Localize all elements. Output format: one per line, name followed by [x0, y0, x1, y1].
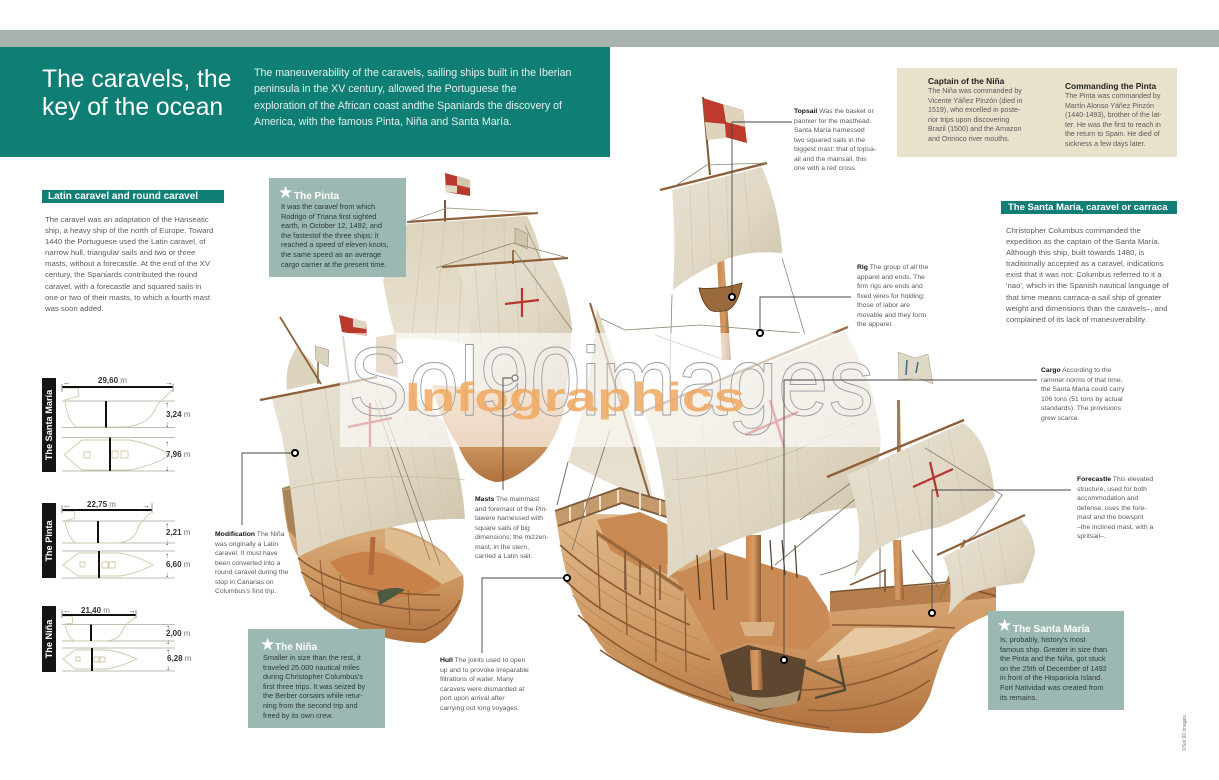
callout box: The Pinta: [269, 178, 406, 277]
sail: Pinta fore: [458, 261, 572, 400]
text: [281, 202, 389, 269]
ship: Santa María: [555, 97, 1035, 733]
callout: Topsail: Santa María harnessed: [794, 127, 865, 134]
callout: Forecastle: –the inclined mast, with a: [1077, 524, 1153, 531]
dimension arrows: ↑: [165, 439, 169, 448]
text: during Christopher Columbus's: [263, 672, 363, 681]
text: Captain of the Niña: rior trips upon discovering: [928, 116, 1009, 124]
sterncastle: Santa María: [597, 512, 680, 568]
tab: The Pinta: The Pinta: [44, 520, 54, 561]
callout: Modification: been converted into a: [215, 560, 280, 567]
text: Commanding the Pinta: sickness a few days later.: [1065, 140, 1145, 148]
dimension arrows: ↓: [165, 420, 169, 429]
credit: ©Sol 90 Images: [1182, 715, 1188, 751]
callout: Topsail: biggest mast: that of topsa-: [794, 146, 876, 153]
forecastle: Santa María: [830, 580, 996, 612]
hull: Niña: [282, 488, 464, 643]
text: [1000, 635, 1107, 702]
sail: Santa María bowsprit: [943, 518, 1035, 615]
callout: Rig: the apparel.: [857, 321, 893, 328]
text: Latin caravel: ship, a heavy ship of the north of Europe. Toward: [45, 226, 213, 235]
header panel: [0, 47, 610, 157]
title: key of the ocean: [42, 94, 223, 121]
deck: Santa María: [597, 537, 830, 653]
dimension arrows: ↓: [165, 570, 169, 579]
text: Santa María: expedition as the captain of the Santa María.: [1006, 237, 1160, 246]
text: Latin caravel: masts, without a forecastle. At the end of the XV: [45, 259, 210, 268]
callout: Rig: apparel and ends. The: [857, 274, 925, 281]
dimension: 6,28 m: 6,28 m: [167, 654, 191, 663]
icon: star: ★: [997, 616, 1012, 635]
title: [42, 66, 231, 121]
dimension arrows: ↑: [165, 551, 169, 560]
text: its remains.: [1000, 693, 1037, 702]
intro text: peninsula in the XV century, allowed the Portuguese the: [254, 83, 516, 95]
text: reached a speed of eleven knots,: [281, 240, 389, 249]
callout: Cargo: Cargo According to the: [1041, 367, 1111, 374]
callout: Hull: caravels were dismantled at: [440, 686, 524, 693]
callout: Cargo: standards). The provisions: [1041, 405, 1121, 412]
text: the Berber corsairs while retur-: [263, 691, 363, 700]
callout: Forecastle: accommodation and: [1077, 495, 1138, 502]
heading: Latin caravel and round caravel: [42, 190, 224, 203]
callout: Modification: Columbus's first trip.: [215, 588, 276, 595]
dimension arrows: →: [128, 606, 136, 615]
text: freed by its own crew.: [263, 711, 333, 720]
callout box: The Niña: [248, 629, 385, 728]
callout: Rig: movable and they form: [857, 312, 926, 319]
tab: The Niña: [42, 606, 56, 672]
dimension arrows: ←: [63, 606, 71, 615]
text: first three trips. It was seized by: [263, 682, 365, 691]
callout: Forecastle: mast and the bowsprit: [1077, 514, 1144, 521]
callout: Topsail: ail and the mainsail, this: [794, 156, 867, 163]
text: Latin caravel: was soon added.: [45, 304, 104, 313]
text: Captain of the Niña: [928, 87, 1022, 143]
leader: Hull: [482, 575, 570, 653]
text: Rodrigo of Triana first sighted: [281, 212, 376, 221]
callout: Modification: was originally a Latin: [215, 541, 278, 548]
callout: Rig: firm rigs are ends and: [857, 283, 923, 290]
callout: Topsail: Topsail Was the basket or: [794, 108, 874, 115]
plans: Santa María: [62, 384, 175, 471]
callout: Masts: carried a Latin sail.: [475, 553, 532, 560]
text: Smaller in size than the rest, it: [263, 653, 361, 662]
flag: Niña main: [339, 315, 367, 336]
callout: Topsail: one with a red cross.: [794, 165, 857, 172]
text: Commanding the Pinta: the return to Spain. He died of: [1065, 130, 1160, 138]
leader: Forecastle: [929, 490, 1071, 616]
title: The caravels, the: [42, 66, 231, 93]
leader: Topsail: [729, 122, 792, 300]
text: Captain of the Niña: Brazil (1500) and the Amazon: [928, 125, 1021, 133]
callout: Cargo: [1041, 367, 1124, 422]
cross: Santa María main: [745, 400, 798, 447]
ship: Pinta: [376, 173, 572, 482]
callout: Modification: caravel. It must have: [215, 550, 278, 557]
watermark: Infographics: Infographics: [405, 374, 745, 420]
waist beam: Santa María: [597, 533, 683, 590]
mizzen sail: Niña: [286, 347, 320, 390]
text: in front of the Hispaniola Island.: [1000, 673, 1102, 682]
text: Santa María: exist that it was not: Columbus referred to it a: [1006, 270, 1162, 279]
text: ning from the second trip and: [263, 701, 358, 710]
text: Santa María: [1006, 226, 1169, 324]
text: Santa María: complained of its lack of maneuverability.: [1006, 315, 1147, 324]
text: Santa María: that time means carraca-a sail ship of greater: [1006, 293, 1162, 302]
heading: The Santa María, caravel or carraca: The Santa María, caravel or carraca: [1008, 202, 1167, 213]
dimension: 7,96 m: 7,96 m: [166, 450, 190, 459]
text: Commanding the Pinta: ter. He was the first to reach in: [1065, 121, 1161, 129]
text: Captain of the Niña: 1519), who excelled in poste-: [928, 106, 1020, 114]
text: Latin caravel: caravel, with a forecastle and squared sails in: [45, 282, 201, 291]
callout: Forecastle: structure, used for both: [1077, 486, 1147, 493]
dimension arrows: ↓: [166, 637, 170, 646]
dimension arrows: ↓: [165, 538, 169, 547]
dimension: 2,21 m: 2,21 m: [166, 528, 190, 537]
callout: Rig: those of labor are: [857, 302, 910, 309]
dimension: 3,24 m: 3,24 m: [166, 410, 190, 419]
plans: Pinta: [62, 503, 175, 578]
callout: Masts: and foremast of the Pin-: [475, 506, 548, 513]
text: the same speed as an average: [281, 250, 381, 259]
text: Commanding the Pinta: [1065, 92, 1162, 148]
heading: The Pinta: [294, 191, 339, 202]
ship: Niña: [260, 315, 465, 643]
text: Santa María: Although this ship, built towards 1480, is: [1006, 248, 1144, 257]
intro text: America, with the famous Pinta, Niña and Santa María.: [254, 116, 512, 128]
callout: Cargo: the Santa María could carry: [1041, 386, 1124, 393]
callout: Topsail: [794, 108, 876, 172]
plans: Niña: [62, 610, 175, 671]
dimension: 21,40 m: 21,40 m: [81, 606, 110, 615]
callout: Cargo: rammer norms of that time,: [1041, 377, 1123, 384]
icon: star: ★: [278, 183, 293, 202]
text: Latin caravel: century, the Spaniards contributed the round: [45, 270, 197, 279]
flag: Pinta fore: [515, 228, 528, 249]
deck: Niña: [330, 552, 442, 598]
text: Commanding the Pinta: The Pinta was commanded by: [1065, 92, 1160, 100]
intro text: [254, 67, 571, 128]
bow planking: Santa María: [816, 628, 937, 662]
dimension arrows: ↑: [165, 400, 169, 409]
callout: Masts: dimensions; the mizzen-: [475, 534, 548, 541]
text: Santa María: 'nao', which in the Spanish nautical language of: [1006, 281, 1169, 290]
panel: commanders: [897, 68, 1177, 157]
watermark: Sol90images: Sol90images: [348, 327, 874, 436]
text: famous ship. Greater in size than: [1000, 645, 1107, 654]
cross: Niña: [348, 403, 392, 447]
callout: Forecastle: spritsail–.: [1077, 533, 1106, 540]
dimension arrows: ↓: [165, 464, 169, 473]
leader: Rig: [757, 297, 851, 336]
text: earth, in October 12, 1492, and: [281, 221, 382, 230]
callout: Hull: carrying out long voyages.: [440, 705, 519, 712]
mast: Santa María upper: [717, 258, 731, 360]
text: traveled 25.000 nautical miles: [263, 663, 360, 672]
tab: The Niña: The Niña: [44, 620, 54, 658]
tab: The Pinta: [42, 503, 56, 578]
text: on the 25th of December of 1492: [1000, 664, 1107, 673]
callout: Rig: fixed wires for holding;: [857, 293, 925, 300]
text: the fastestof the three ships: it: [281, 231, 378, 240]
intro text: The maneuverability of the caravels, sailing ships built in the Iberian: [254, 67, 571, 79]
sail: Santa María topsail: [672, 167, 782, 290]
text: Santa María: weight and dimensions than the caravels–, and: [1006, 304, 1168, 313]
heading: Commanding the Pinta: Commanding the Pinta: [1065, 81, 1156, 91]
heading: Latin caravel and round caravel: Latin caravel and round caravel: [48, 191, 198, 202]
leader: Cargo: [781, 380, 1037, 663]
dimension arrows: ↑: [166, 623, 170, 632]
dimension arrows: ↓: [166, 663, 170, 672]
sail: Niña main: [272, 381, 465, 557]
text: Santa María: traditionally accepted as a caravel, indications: [1006, 259, 1164, 268]
crow's nest: [699, 283, 742, 312]
sail: Pinta main: [383, 216, 541, 345]
top grey band: [0, 30, 1219, 47]
text: Latin caravel: The caravel was an adaptation of the Hanseatic: [45, 215, 209, 224]
watermark band: [340, 333, 881, 447]
flag: Santa María fore: [898, 352, 933, 384]
dimension arrows: →: [165, 378, 173, 387]
callout: Cargo: 106 tons (51 tons by actual: [1041, 396, 1123, 403]
callout: Hull: [440, 657, 529, 712]
flag: Santa María main: [703, 97, 747, 175]
text: Commanding the Pinta: (1440-1493), brother of the lat-: [1065, 111, 1162, 119]
dimension arrows: ↑: [165, 521, 169, 530]
hold: Santa María: [720, 645, 806, 712]
dimension arrows: ←: [63, 501, 71, 510]
text: Latin caravel: one or two of their masts, to which a fourth mast: [45, 293, 210, 302]
text: the Pinta and the Niña, got stuck: [1000, 654, 1105, 663]
sail: Santa María fore: [847, 423, 995, 580]
callout box: The Santa María: [988, 611, 1124, 710]
mizzen sail: Santa María: [568, 308, 654, 502]
stern structure: Pinta: [376, 334, 398, 378]
text: Latin caravel: 1440 the Portuguese used the Latin caravel, of: [45, 237, 206, 246]
callout: Rig: [857, 264, 928, 328]
inner wall: Niña: [385, 528, 463, 585]
dimension arrows: [63, 378, 173, 672]
mast: Santa María main: [746, 535, 761, 622]
dimension arrows: ←: [63, 378, 71, 387]
leader: Modification: [242, 450, 298, 525]
hull: Santa María: [555, 513, 996, 733]
text: [263, 653, 366, 720]
callout: Cargo: grew scarce.: [1041, 415, 1080, 422]
callout: Forecastle: [1077, 476, 1154, 540]
text: cargo carrier at the present time.: [281, 260, 386, 269]
text: Latin caravel: [45, 215, 213, 313]
text: Santa María: Christopher Columbus commanded the: [1006, 226, 1141, 235]
dimension: 6,60 m: 6,60 m: [166, 560, 190, 569]
callout: Modification: [215, 531, 288, 595]
callout: Hull: Hull The joints used to open: [440, 657, 525, 664]
dimension: 2,00 m: 2,00 m: [166, 629, 190, 638]
text: Is, probably, history's most: [1000, 635, 1086, 644]
dimension arrows: ↑: [166, 647, 170, 656]
text: Commanding the Pinta: Martín Alonso Yáñez Pinzón: [1065, 102, 1154, 110]
text: Captain of the Niña: Vicente Yáñez Pinzón (died in: [928, 97, 1022, 105]
callout: Topsail: two squared sails in the: [794, 137, 865, 144]
callout: Rig: Rig The group of all the: [857, 264, 928, 271]
heading: The Santa María: [1013, 624, 1090, 635]
flag: Pinta: [445, 173, 470, 222]
callout: Modification: round caravel during the: [215, 569, 288, 576]
rigging: Santa María shrouds: [697, 540, 797, 610]
text: Latin caravel: narrow hull, triangular sails and two or three: [45, 248, 195, 257]
tab: The Santa María: [42, 378, 56, 472]
heading: The Niña: [275, 642, 317, 653]
callout: Modification: stop in Canarias on: [215, 579, 274, 586]
callout: Hull: filtrations of water. Many: [440, 676, 513, 683]
callout: Masts: Masts The mainmast: [475, 496, 539, 503]
tab: The Santa María: The Santa María: [44, 390, 54, 460]
callout: Masts: square sails of big: [475, 525, 530, 532]
callout: Masts: [475, 496, 548, 560]
text: Captain of the Niña: and Orinoco river mouths.: [928, 135, 1010, 143]
callout: Masts: tawere harnessed with: [475, 515, 543, 522]
flag: Niña mizzen: [315, 346, 329, 367]
dimension: 29,60 m: 29,60 m: [98, 376, 127, 385]
heading: Captain of the Niña: Captain of the Niña: [928, 76, 1004, 86]
callout: Forecastle: defense, uses the fore-: [1077, 505, 1147, 512]
callout: Hull: up and to provoke irreparable: [440, 667, 529, 674]
hull: Pinta: [432, 385, 568, 482]
text: Captain of the Niña: The Niña was commanded by: [928, 87, 1022, 95]
callout: Hull: port upon arrival after: [440, 695, 505, 702]
dimension: 22,75 m: 22,75 m: [87, 500, 116, 509]
callout: Masts: mast, in the stern,: [475, 544, 529, 551]
text: Fort Natividad was created from: [1000, 683, 1103, 692]
callout: Forecastle: Forecastle This elevated: [1077, 476, 1153, 483]
callout: Topsail: pannier for the masthead.: [794, 118, 871, 125]
sail: Santa María main: [645, 332, 881, 578]
planks: Santa María: [560, 545, 955, 728]
leader: Masts: [503, 375, 518, 490]
icon: star: ★: [260, 635, 275, 654]
cross: Santa María fore: [913, 462, 953, 497]
foremast: Santa María: [897, 400, 901, 470]
callout: Modification: Modification The Niña: [215, 531, 284, 538]
text: It was the caravel from which: [281, 202, 375, 211]
anchor: [800, 655, 845, 698]
intro text: exploration of the African coast andthe Spaniards the discovery of: [254, 100, 562, 112]
cross: Pinta: [505, 288, 539, 317]
dimension arrows: →: [142, 501, 150, 510]
